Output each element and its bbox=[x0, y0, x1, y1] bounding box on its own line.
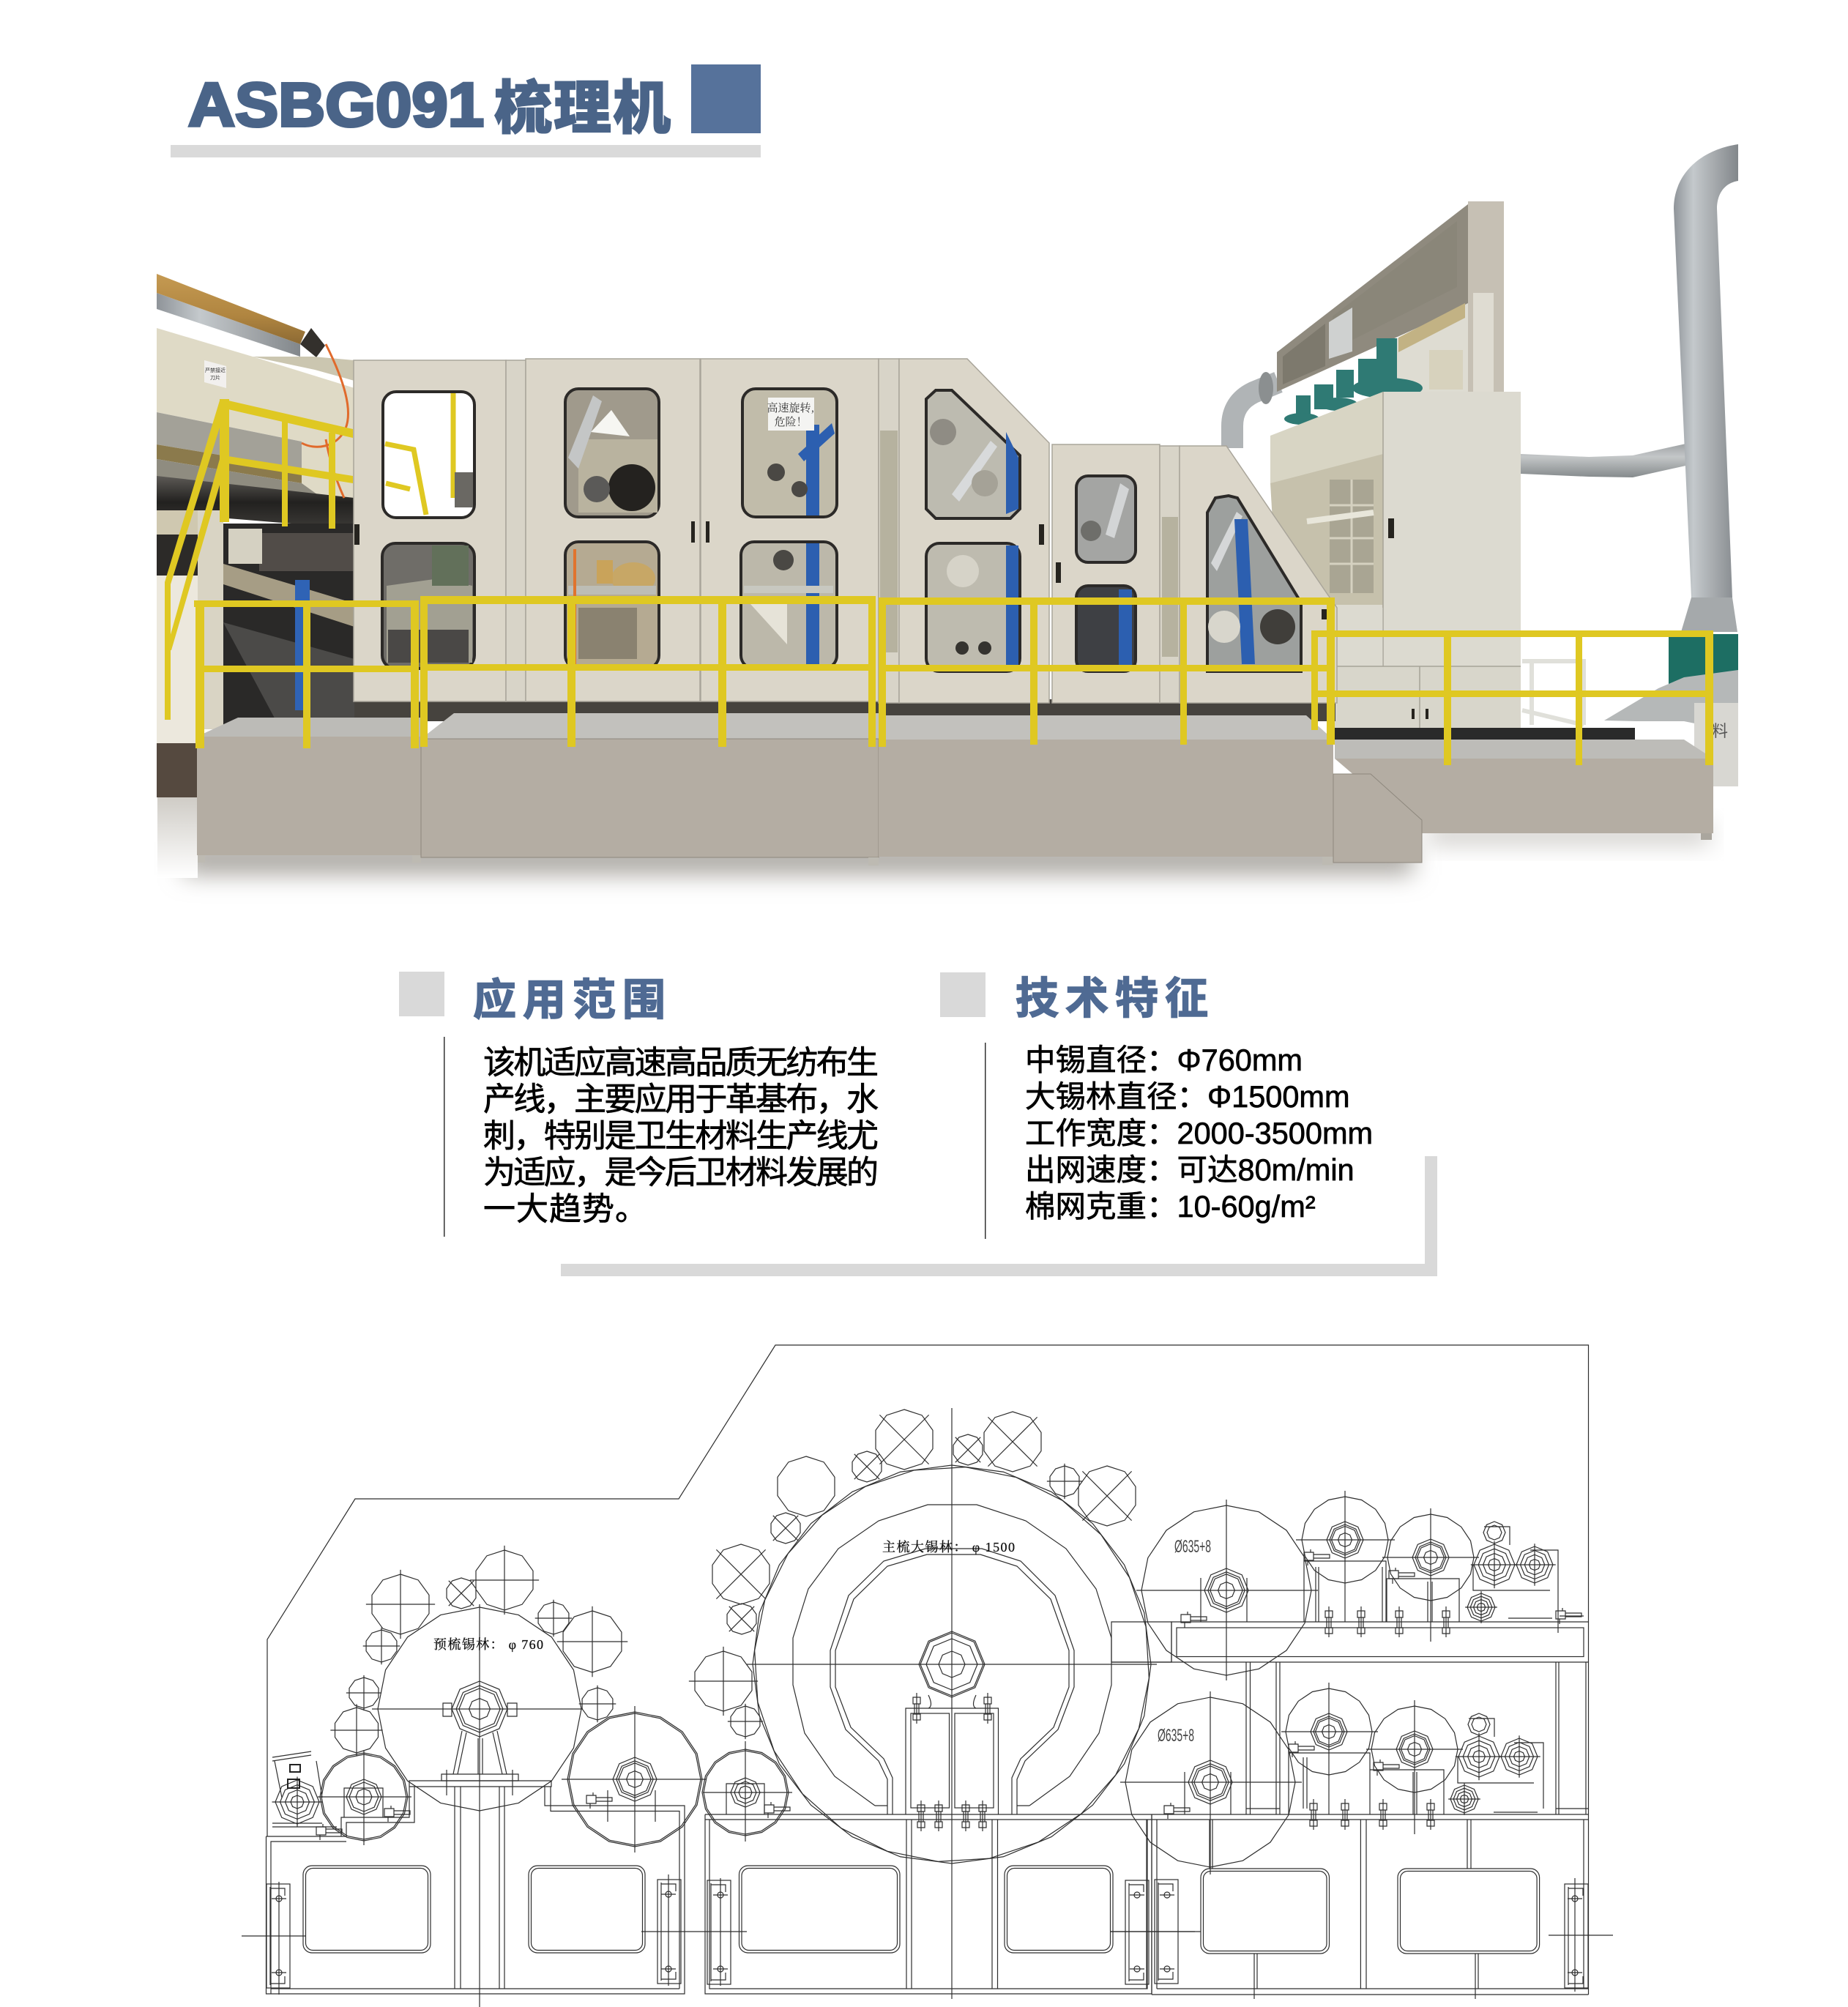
main cylinder φ1500 bbox=[741, 1453, 1163, 1875]
floor shadow bbox=[157, 797, 1710, 878]
tall duct pipe bbox=[1604, 144, 1738, 786]
recessed hood with filter screen bbox=[1270, 392, 1383, 608]
yellow guard rail C bbox=[879, 597, 1335, 747]
upper stripping rollers bbox=[1296, 1491, 1479, 1642]
features divider bbox=[985, 1043, 986, 1239]
platform base B bbox=[421, 713, 879, 865]
yellow stair rail bbox=[165, 399, 353, 720]
features list: 出网速度：可达80m/min bbox=[1025, 1153, 1355, 1187]
warning label on left machine bbox=[204, 360, 226, 388]
licker-in roller bbox=[318, 1750, 411, 1845]
tall duct pipe: 料 bbox=[1712, 718, 1728, 742]
window 1 upper: see-through bbox=[383, 392, 474, 518]
window 1 lower bbox=[382, 543, 474, 669]
title: 梳理机 bbox=[494, 61, 672, 145]
features list: 大锡林直径：Φ1500mm bbox=[1025, 1079, 1350, 1114]
window 3 upper with warning note: 高速旋转, bbox=[767, 400, 814, 415]
narrow side slots bbox=[880, 431, 1178, 657]
window 4 upper bbox=[926, 390, 1020, 518]
application divider bbox=[444, 1037, 445, 1237]
main cylinder workers and strippers bbox=[689, 1410, 1136, 1739]
technical drawing bbox=[242, 1345, 1613, 2007]
pre-carding workers and strippers bbox=[330, 1546, 627, 1757]
window 6 sloped bbox=[1207, 496, 1301, 671]
application text: 该机适应高速高品质无纺布生 bbox=[483, 1045, 879, 1081]
left web-former machine bbox=[157, 328, 354, 797]
window 2 lower bbox=[565, 542, 659, 669]
title bbox=[188, 61, 672, 145]
panel: technical features bbox=[940, 964, 1373, 1239]
features marker square bbox=[940, 972, 986, 1017]
main section frame bbox=[705, 1408, 1589, 1999]
yellow guard rail B bbox=[420, 596, 876, 747]
platform base D bbox=[1335, 740, 1713, 840]
feed roller assembly bbox=[272, 1751, 342, 1840]
platform base A bbox=[197, 718, 421, 863]
lower doffer φ635 bbox=[1120, 1691, 1302, 1874]
features list: 中锡直径：Φ760mm bbox=[1025, 1043, 1303, 1077]
application text bbox=[483, 1045, 879, 1227]
window 5 lower bbox=[1076, 586, 1136, 671]
step block bbox=[1333, 774, 1422, 863]
features list bbox=[1025, 1043, 1373, 1224]
title underline bar bbox=[171, 145, 761, 157]
window 5 upper bbox=[1076, 476, 1136, 562]
window 2 upper bbox=[565, 389, 659, 517]
yellow guard rail D bbox=[1311, 630, 1713, 765]
features list: 棉网克重：10-60g/m² bbox=[1025, 1189, 1316, 1224]
window 4 lower bbox=[926, 543, 1020, 671]
main cylinder label: 主梳大锡林： φ 1500 bbox=[882, 1540, 1015, 1554]
title: ASBG091 bbox=[188, 70, 484, 139]
upper condenser rollers bbox=[1465, 1522, 1584, 1633]
green fan motors bbox=[1284, 338, 1423, 425]
features list: 工作宽度：2000-3500mm bbox=[1025, 1116, 1373, 1150]
application text: 产线，主要应用于革基布，水 bbox=[483, 1081, 879, 1117]
doffer section frame bbox=[1110, 1561, 1613, 1999]
pre-carding label: 预梳锡林： φ 760 bbox=[433, 1637, 543, 1652]
lower doffer label: Ø635+8 bbox=[1158, 1726, 1194, 1746]
panel: application scope bbox=[399, 965, 879, 1237]
pre-carding cylinder φ760 bbox=[372, 1607, 583, 1811]
window 3 upper with warning note bbox=[742, 389, 837, 517]
cabinet panels bbox=[354, 359, 1337, 703]
application text: 为适应，是今后卫材料发展的 bbox=[483, 1155, 879, 1191]
door handles bbox=[354, 521, 1327, 619]
upper doffer φ635 bbox=[1136, 1500, 1318, 1680]
cabinet bottom dark strip bbox=[354, 699, 1335, 721]
title square accent bbox=[691, 64, 761, 133]
features heading: 技术特征 bbox=[1016, 964, 1215, 1026]
warning label on left machine: 刀片 bbox=[210, 374, 220, 381]
application heading: 应用范围 bbox=[473, 965, 672, 1027]
lower condenser rollers bbox=[1448, 1713, 1543, 1815]
upper doffer label: Ø635+8 bbox=[1174, 1537, 1211, 1557]
application marker square bbox=[399, 972, 444, 1016]
window 3 upper with warning note: 危险！ bbox=[774, 414, 808, 429]
transfer roller left of main cylinder bbox=[702, 1741, 792, 1842]
window 3 lower bbox=[741, 542, 837, 669]
photo: carding machine line bbox=[157, 144, 1738, 878]
cross duct pipe bbox=[1521, 443, 1689, 477]
lower stripping rollers bbox=[1281, 1683, 1463, 1834]
pre-carding section frame bbox=[242, 1604, 747, 2007]
transfer roller right of φ760 bbox=[562, 1706, 707, 1853]
housing outline bbox=[267, 1345, 1589, 1995]
yellow guard rail A bbox=[194, 600, 419, 748]
right tall cabinet bbox=[1333, 392, 1635, 740]
gold roller and silver rod bbox=[157, 274, 325, 357]
left curved pipe bbox=[1232, 372, 1278, 448]
application text: 一大趋势。 bbox=[483, 1191, 648, 1227]
platform base C bbox=[879, 715, 1333, 865]
corner bracket decoration bbox=[561, 1156, 1437, 1276]
application text: 刺，特别是卫生材料生产线尤 bbox=[483, 1118, 879, 1154]
warning label on left machine: 严禁接近 bbox=[205, 367, 226, 374]
upper hopper frame bbox=[1277, 201, 1504, 392]
